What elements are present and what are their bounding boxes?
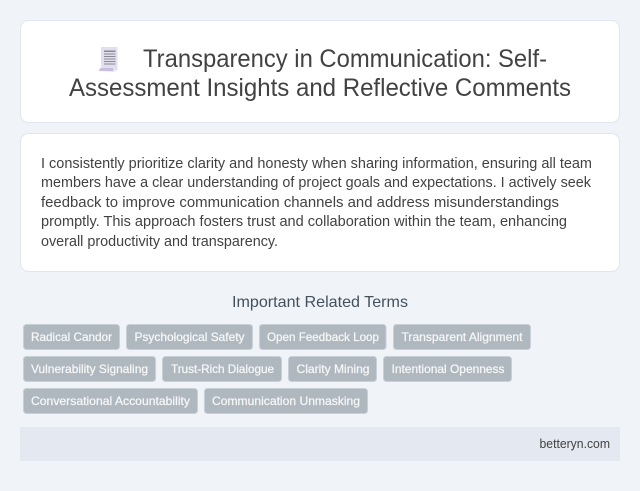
- tag: Psychological Safety: Psychological Safety: [134, 330, 244, 344]
- tag: Communication Unmasking: [204, 388, 368, 414]
- text block: comment body: feedback to improve communication channels and address misunderstandings: [41, 194, 559, 211]
- tag: Communication Unmasking: Communication Unmasking: [212, 394, 360, 408]
- icon: scroll document: [99, 47, 118, 72]
- tag: Clarity Mining: [288, 356, 376, 382]
- heading: important related terms: Important Related Terms: [232, 294, 408, 311]
- text block: comment body: promptly. This approach fosters trust and collaboration within the team, enhancing: [41, 213, 567, 230]
- tag: Conversational Accountability: Conversational Accountability: [31, 394, 190, 408]
- tag: Psychological Safety: [126, 324, 252, 350]
- tag: Open Feedback Loop: Open Feedback Loop: [267, 330, 379, 344]
- title: Transparency in Communication: Self-: [143, 45, 547, 73]
- tag: Intentional Openness: Intentional Openness: [392, 362, 504, 376]
- panel: reflective comment: [20, 134, 620, 272]
- tag: Vulnerability Signaling: Vulnerability Signaling: [31, 362, 148, 376]
- tag: Vulnerability Signaling: [24, 356, 156, 382]
- tag: Clarity Mining: Clarity Mining: [296, 362, 370, 376]
- tag: Radical Candor: Radical Candor: [31, 330, 112, 344]
- text block: comment body: I consistently prioritize clarity and honesty when sharing information, ensuring all team: [41, 155, 592, 172]
- panel: title card: [20, 20, 620, 122]
- text block: comment body: [41, 155, 592, 250]
- tag: Transparent Alignment: [394, 324, 530, 350]
- tag: Transparent Alignment: Transparent Alignment: [402, 330, 523, 344]
- tag: Conversational Accountability: [24, 388, 198, 414]
- tag: Radical Candor: [24, 324, 120, 350]
- tag: Trust-Rich Dialogue: Trust-Rich Dialogue: [171, 362, 274, 376]
- tag: Open Feedback Loop: [260, 324, 386, 350]
- text block: comment body: members have a clear understanding of project goals and expectations. I actively seek: [41, 174, 591, 191]
- tags: related terms: [24, 324, 530, 414]
- footer: [20, 427, 620, 461]
- footer: site name: betteryn.com: [540, 436, 610, 451]
- title: Assessment Insights and Reflective Comments: [69, 74, 571, 102]
- tag: Intentional Openness: [384, 356, 512, 382]
- title: [69, 45, 571, 102]
- text block: comment body: overall productivity and transparency.: [41, 233, 278, 250]
- tag: Trust-Rich Dialogue: [162, 356, 282, 382]
